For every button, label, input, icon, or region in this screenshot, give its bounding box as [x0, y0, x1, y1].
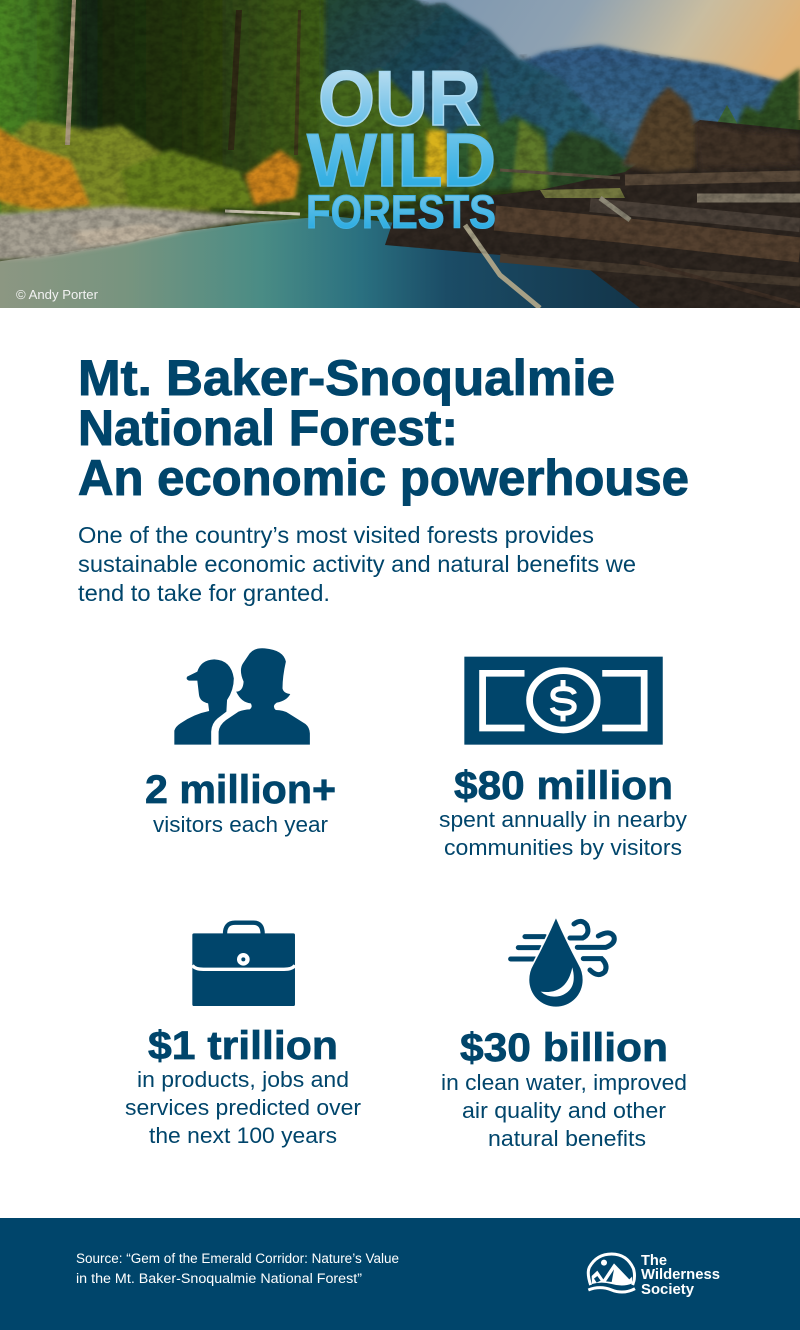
- main heading: [78, 350, 689, 506]
- caption: products, jobs and services: [125, 1067, 361, 1148]
- logo: The Wilderness Society: [588, 1252, 720, 1298]
- caption: spent annually: [439, 807, 687, 860]
- caption: products, jobs and services: the next 100 years: [149, 1123, 337, 1148]
- logo: The Wilderness Society: Wilderness: [641, 1266, 720, 1283]
- source citation: Source: “Gem of the Emerald Corridor: Nature’s Value: [76, 1251, 399, 1266]
- stat: visitor spending: [439, 657, 687, 860]
- near mountain slope: [323, 0, 629, 172]
- far mountain ridge: [500, 45, 783, 170]
- main heading: An economic powerhouse: [78, 450, 689, 506]
- hero title: Our Wild Forests: OUR: [318, 54, 481, 142]
- stat: products and jobs: [125, 923, 361, 1148]
- icon: two visitors: [174, 648, 310, 745]
- logo: The Wilderness Society: Society: [641, 1281, 695, 1298]
- icon: briefcase: [192, 923, 295, 1006]
- main heading: National Forest:: [78, 400, 458, 456]
- gravel shore: [0, 206, 305, 260]
- figure: $30 billion: $30 billion: [460, 1026, 668, 1070]
- sky: [400, 0, 800, 120]
- hero title: Our Wild Forests: [306, 54, 496, 238]
- stat: visitors: [145, 648, 336, 837]
- caption: spent annually: spent annually in nearby: [439, 807, 687, 832]
- caption: clean water and air: natural benefits: [488, 1126, 646, 1151]
- stat: natural benefits: [441, 918, 687, 1151]
- caption: visitors each year: visitors each year: [153, 812, 328, 837]
- driftwood: [225, 211, 300, 214]
- tree trunks: [65, 0, 76, 145]
- main heading: Mt. Baker-Snoqualmie: [78, 350, 615, 406]
- footer band: [0, 1218, 800, 1330]
- source citation: [76, 1251, 399, 1286]
- water: [0, 216, 660, 308]
- figure: 2 million+: 2 million+: [145, 768, 336, 812]
- hero title: Our Wild Forests: FORESTS: [306, 185, 496, 238]
- logs: [625, 176, 800, 180]
- hero title: Our Wild Forests: WILD: [307, 118, 496, 202]
- caption: clean water and air: in clean water, improved: [441, 1070, 687, 1095]
- photo credit: © Andy Porter: [16, 288, 98, 302]
- figure: $80 million: $80 million: [454, 764, 673, 808]
- hero photo: river, forest and log jam: [0, 0, 800, 308]
- root mass: [622, 86, 695, 172]
- intro paragraph: tend to take for granted.: [78, 580, 330, 606]
- intro paragraph: [78, 522, 636, 606]
- caption: products, jobs and services: in products, jobs and: [137, 1067, 349, 1092]
- intro paragraph: One of the country’s most visited forests provides: [78, 522, 594, 548]
- icon: dollar bill: [464, 657, 663, 745]
- log jam: [385, 120, 800, 308]
- mid-distance green and yellow trees: [425, 65, 630, 190]
- figure: $1 trillion: $1 trillion: [148, 1024, 338, 1068]
- caption: clean water and air: air quality and other: [462, 1098, 666, 1123]
- right trees: [736, 66, 800, 130]
- left forest: [0, 0, 325, 220]
- logo: The Wilderness Society: The: [641, 1252, 667, 1269]
- foliage texture: [0, 0, 800, 308]
- icon: water drop and wind: [511, 918, 614, 1007]
- caption: products, jobs and services: services predicted over: [125, 1095, 361, 1120]
- intro paragraph: sustainable economic activity and natural benefits we: [78, 551, 636, 577]
- source citation: in the Mt. Baker-Snoqualmie National Forest”: [76, 1271, 362, 1286]
- caption: spent annually: communities by visitors: [444, 835, 682, 860]
- caption: clean water and air: [441, 1070, 687, 1151]
- autumn bushes: [0, 120, 300, 214]
